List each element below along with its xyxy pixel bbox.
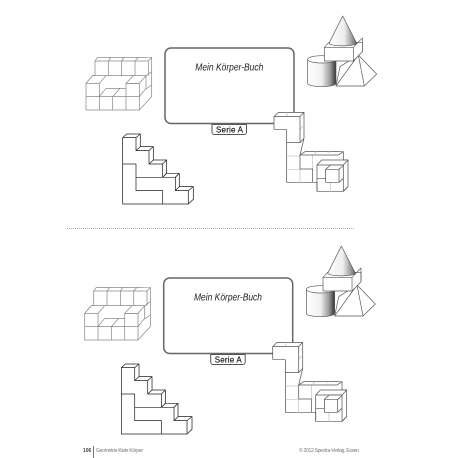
- footer page number: 106: [83, 448, 92, 454]
- top series label: Serie A: [216, 126, 244, 134]
- bottom L-shaped cube figure: [273, 342, 347, 421]
- footer divider: [92, 446, 94, 458]
- bottom book cover: [164, 278, 293, 364]
- top book cover: [165, 48, 294, 134]
- footer series title: Geometrie-Kiste Körper: [96, 448, 143, 454]
- top cover title: Mein Körper-Buch: [195, 62, 264, 74]
- top staircase figure: [123, 134, 193, 204]
- bottom series label: Serie A: [215, 356, 242, 364]
- bottom geometric solids: [306, 246, 375, 317]
- bottom staircase figure: [121, 364, 192, 434]
- bottom cover frame: [164, 278, 293, 354]
- top series tab: [212, 124, 246, 134]
- top cube block figure: [86, 57, 152, 110]
- bottom cover title: Mein Körper-Buch: [194, 292, 262, 304]
- bottom cube block figure: [85, 287, 150, 340]
- top geometric solids: [308, 16, 377, 87]
- cut line: [67, 228, 355, 230]
- top cover frame: [165, 48, 294, 124]
- footer copyright: © 2012 Spectra-Verlag, Essen: [299, 447, 359, 454]
- bottom series tab: [211, 354, 245, 364]
- top L-shaped cube figure: [274, 112, 348, 191]
